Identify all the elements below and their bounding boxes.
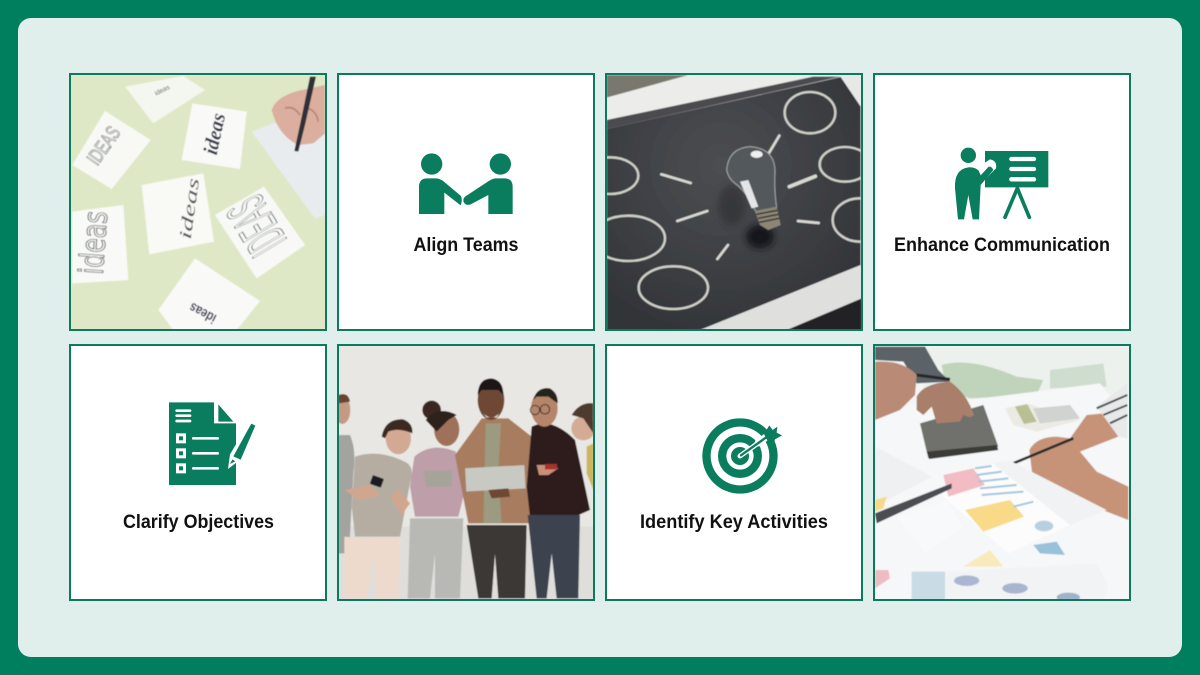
label: Align Teams: Align Teams [414, 235, 518, 256]
label: Clarify Objectives: Clarify Objectives [123, 512, 274, 533]
photo panel: handwritten ideas cards: IDEAS [83, 122, 125, 170]
photo panel: handwritten ideas cards [67, 72, 330, 335]
card: Enhance Communication [874, 74, 1130, 330]
photo panel: reviewing charts at a desk [870, 340, 1135, 605]
photo panel: light bulb on chalkboard [605, 73, 863, 331]
card: Clarify Objectives [70, 345, 326, 600]
label: Identify Key Activities: Identify Key Activities [640, 512, 828, 533]
photo panel: handwritten ideas cards: ideas [154, 84, 172, 97]
icon: handshake [419, 153, 513, 214]
photo panel: handwritten ideas cards: ideas [186, 300, 219, 327]
photo panel: handwritten ideas cards: ideas [200, 111, 230, 157]
photo panel: team around a laptop [334, 340, 600, 605]
icon: target with arrow [702, 418, 782, 494]
photo panel: handwritten ideas cards: IDEAS [216, 185, 299, 266]
photo panel: handwritten ideas cards: ideas [72, 210, 115, 276]
photo panel: handwritten ideas cards: ideas [176, 176, 203, 241]
label: Enhance Communication: Enhance Communication [894, 235, 1110, 256]
icon: checklist with pencil [169, 402, 257, 485]
card: Align Teams [338, 74, 594, 330]
icon: presenter at board [955, 148, 1048, 219]
card: Identify Key Activities [606, 345, 862, 600]
